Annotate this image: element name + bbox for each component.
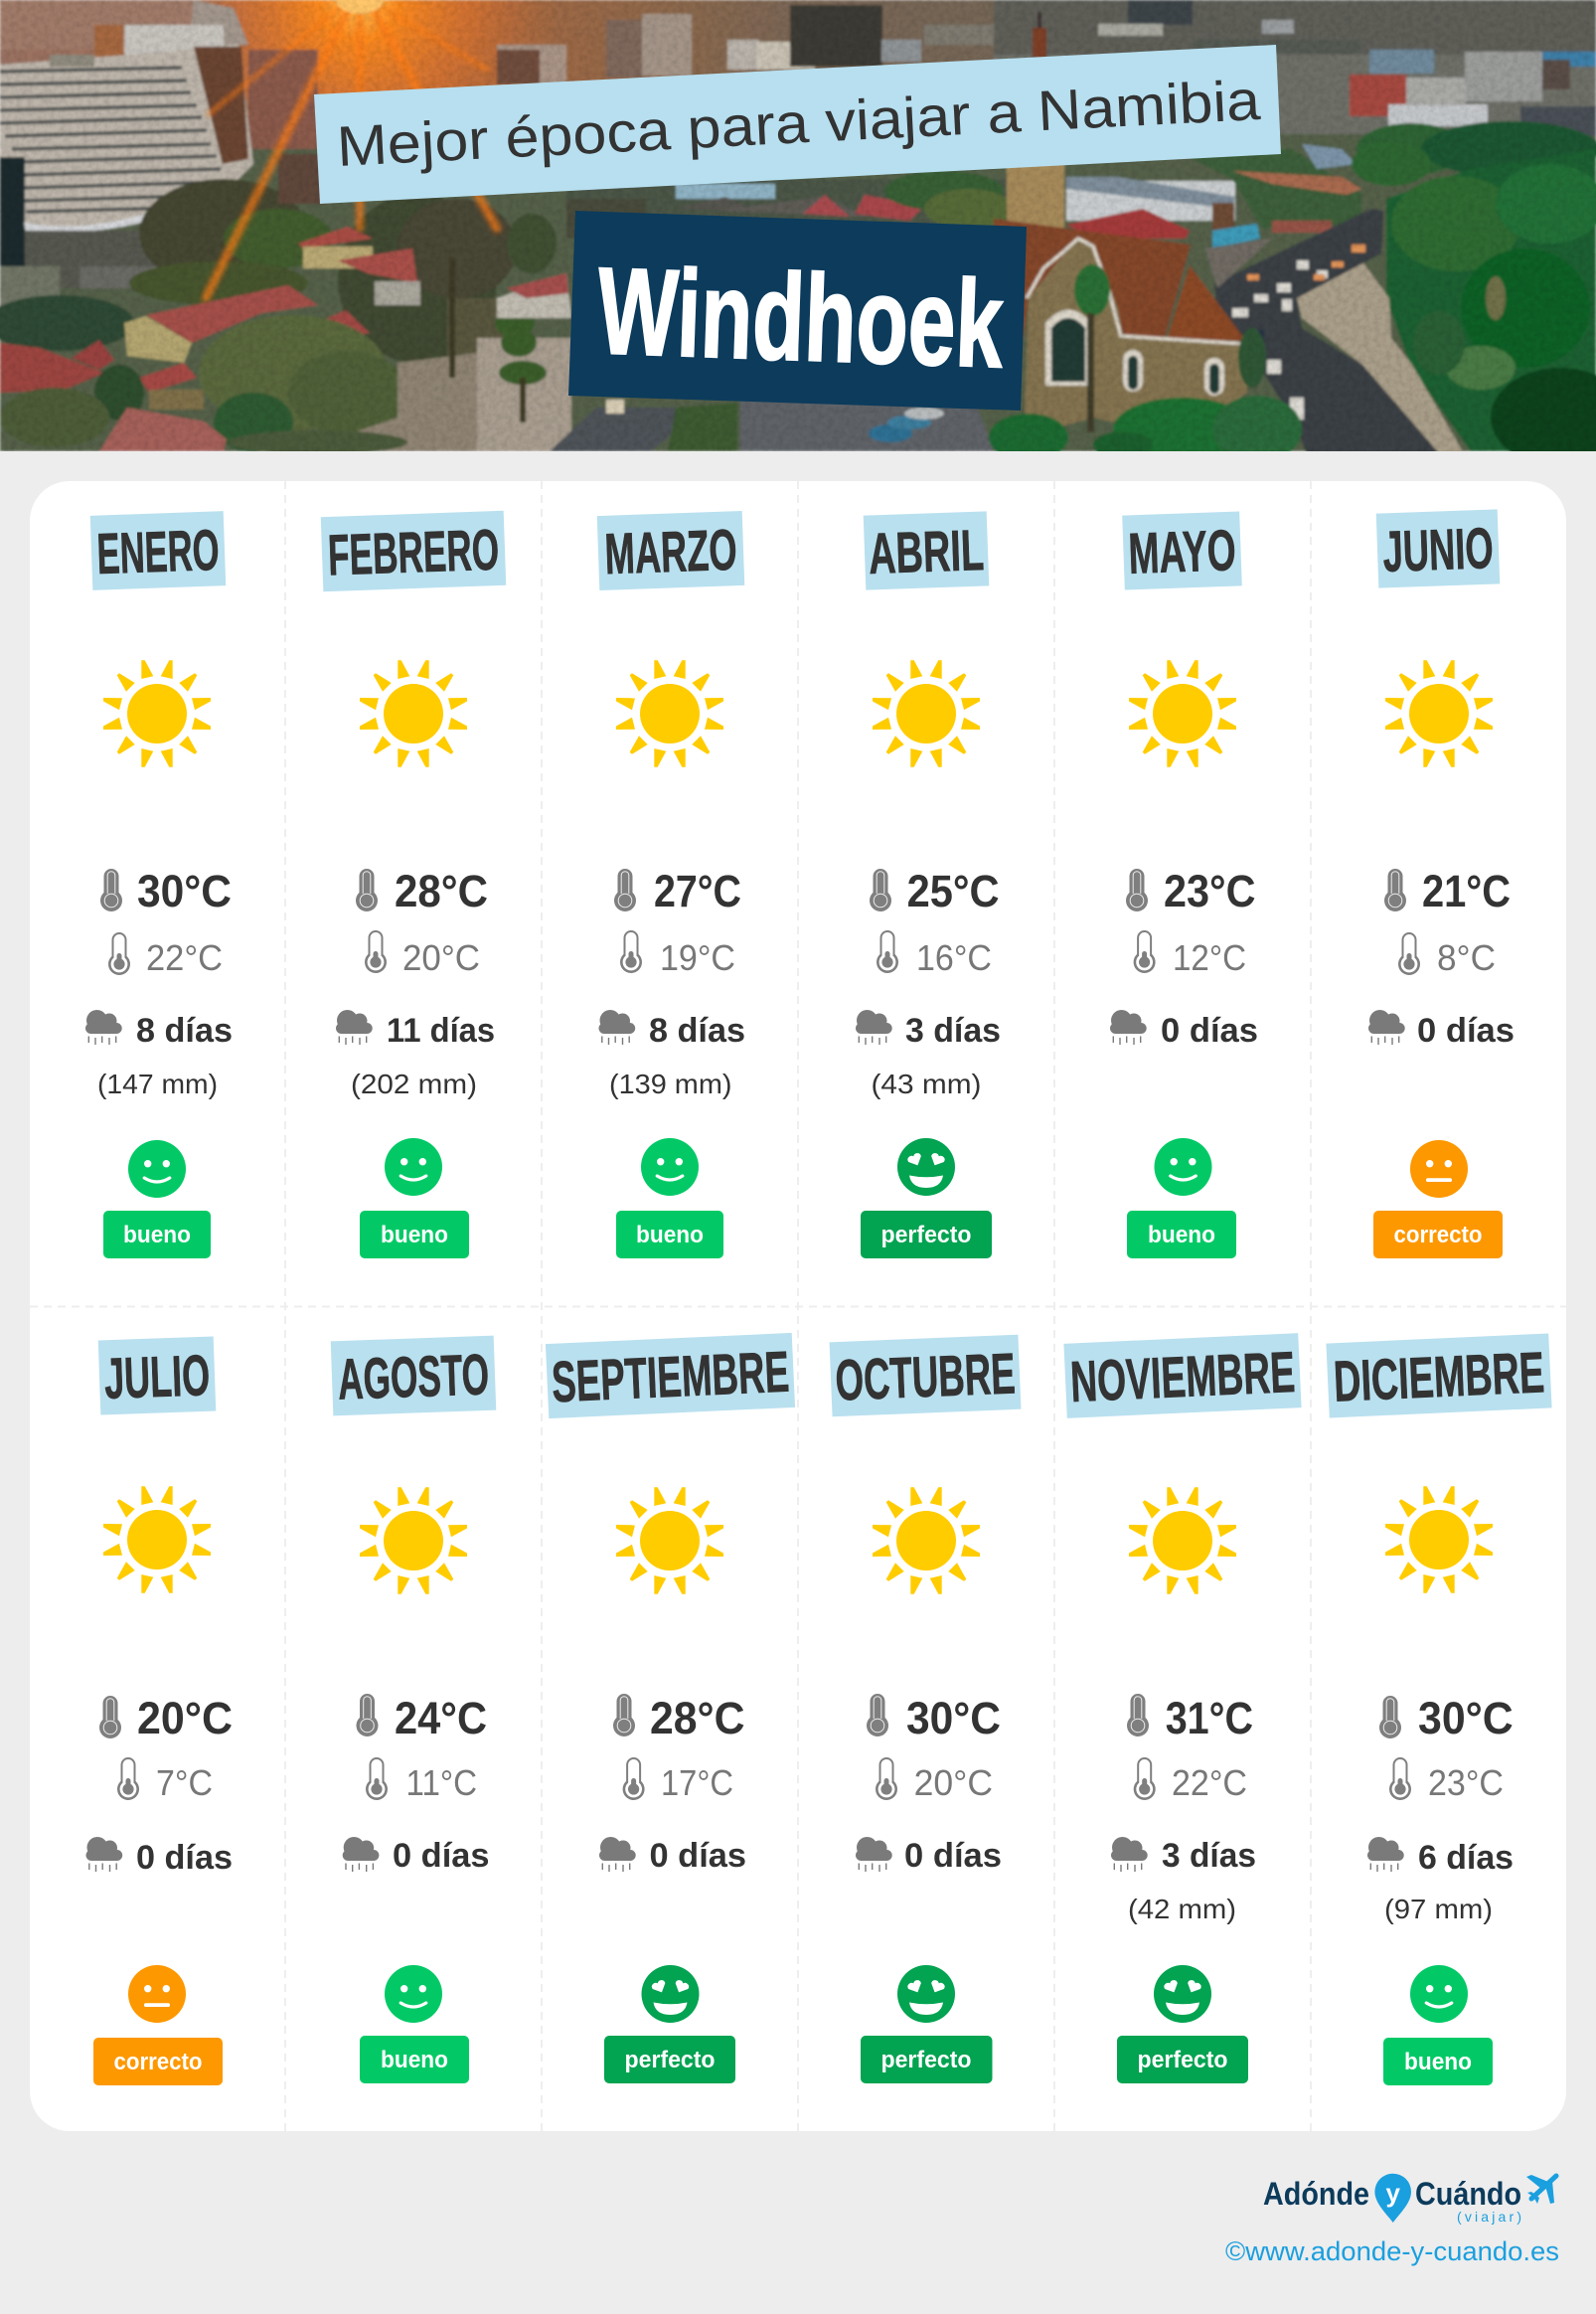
panel: diciembre <box>1326 1333 1552 2085</box>
rating badge <box>360 2036 469 2083</box>
panel: abril <box>856 511 1001 1258</box>
rating badge: perfecto <box>1137 2047 1228 2073</box>
icon: thermometer low <box>876 1757 897 1800</box>
min temperature: 11°C <box>405 1762 477 1803</box>
icon: thermometer high <box>1127 1694 1149 1736</box>
min temperature: 22°C <box>146 937 223 978</box>
icon: thermometer high <box>1384 869 1406 911</box>
icon: neutral face <box>128 1965 186 2023</box>
month label <box>864 511 989 590</box>
max temperature: 28°C <box>395 866 488 916</box>
icon: sun <box>360 1487 467 1594</box>
rating badge: bueno <box>123 1222 191 1248</box>
icon: heart-eyes smiley <box>897 1965 955 2023</box>
month label <box>90 511 226 590</box>
icon: heart-eyes smiley <box>1154 1965 1211 2023</box>
title text: Mejor época para viajar a Namibia <box>335 69 1262 179</box>
rating badge <box>103 1211 211 1258</box>
panel: enero <box>85 511 233 1258</box>
footer logo <box>1263 2174 1556 2225</box>
panel: marzo <box>597 511 745 1258</box>
icon: rain cloud <box>85 1010 122 1045</box>
icon: rain cloud <box>336 1010 373 1045</box>
icon: rain cloud <box>343 1837 379 1872</box>
rainfall: (42 mm) <box>1128 1894 1236 1924</box>
max temperature: 23°C <box>1164 866 1256 916</box>
month label <box>546 1333 795 1418</box>
rainy days: 8 días <box>649 1012 745 1050</box>
icon: sun <box>360 660 467 767</box>
month label: OCTUBRE <box>834 1341 1017 1413</box>
max temperature: 30°C <box>1418 1693 1514 1743</box>
month label: AGOSTO <box>337 1342 490 1412</box>
icon: thermometer high <box>356 869 378 911</box>
rating badge <box>604 2036 735 2083</box>
panel: septiembre <box>546 1333 795 2083</box>
icon: thermometer low <box>623 1757 645 1800</box>
icon: thermometer high <box>100 869 122 911</box>
city name banner <box>568 211 1027 411</box>
min temperature: 8°C <box>1437 937 1496 978</box>
rating badge <box>1383 2038 1493 2085</box>
max temperature: 27°C <box>654 866 741 916</box>
rainy days: 8 días <box>136 1012 233 1050</box>
panel: julio <box>85 1336 233 2085</box>
rating badge: bueno <box>636 1222 704 1248</box>
month label <box>1063 1333 1302 1418</box>
icon: thermometer low <box>365 930 387 973</box>
logo wordmark right: Cuándo <box>1415 2176 1521 2212</box>
rating badge: bueno <box>1148 1222 1215 1248</box>
month label <box>321 511 506 591</box>
rainy days: 6 días <box>1418 1839 1514 1877</box>
min temperature: 19°C <box>660 937 735 978</box>
rainy days: 0 días <box>1161 1012 1258 1050</box>
icon: sun <box>1129 1487 1236 1594</box>
icon: sun <box>1129 660 1236 767</box>
icon: rain cloud <box>1110 1010 1147 1045</box>
max temperature: 30°C <box>906 1693 1001 1743</box>
min temperature: 16°C <box>916 937 992 978</box>
icon: thermometer low <box>117 1757 139 1800</box>
main white card <box>30 481 1566 2131</box>
icon: sun <box>616 1487 723 1594</box>
month label <box>1376 509 1500 588</box>
rating badge <box>1127 1211 1236 1258</box>
rating badge: bueno <box>381 1222 448 1248</box>
icon: heart-eyes smiley <box>642 1965 700 2023</box>
icon: smiley <box>385 1138 442 1196</box>
rating badge: perfecto <box>880 2047 972 2073</box>
icon: sun <box>1385 1486 1493 1593</box>
header photo: Windhoek city view <box>0 0 1596 467</box>
rainfall: (97 mm) <box>1384 1894 1493 1924</box>
rainfall: (139 mm) <box>609 1069 731 1099</box>
icon: thermometer low <box>1389 1757 1411 1800</box>
icon: thermometer low <box>366 1757 388 1800</box>
icon: rain cloud <box>856 1837 892 1872</box>
min temperature: 7°C <box>156 1762 213 1803</box>
icon: heart-eyes smiley <box>897 1138 955 1196</box>
icon: smiley <box>1155 1138 1212 1196</box>
rating badge <box>93 2038 223 2085</box>
icon: thermometer high <box>356 1694 378 1736</box>
icon: smiley <box>641 1138 699 1196</box>
max temperature: 21°C <box>1422 866 1511 916</box>
panel: febrero <box>321 511 506 1258</box>
icon: thermometer high <box>614 869 636 911</box>
icon: sun <box>103 660 211 767</box>
rating badge <box>861 2036 992 2083</box>
logo pin: y <box>1385 2178 1400 2208</box>
icon: thermometer high <box>1126 869 1148 911</box>
icon: rain cloud <box>1111 1837 1148 1872</box>
rainy days: 0 días <box>650 1837 746 1875</box>
icon: rain cloud <box>599 1837 636 1872</box>
icon: sun <box>1385 660 1493 767</box>
month label <box>98 1336 216 1415</box>
rainy days: 0 días <box>393 1837 489 1875</box>
month label <box>1122 511 1242 590</box>
icon: smiley <box>128 1140 186 1198</box>
max temperature: 30°C <box>137 866 232 916</box>
panel: agosto <box>331 1336 496 2083</box>
icon: rain cloud <box>1368 1010 1405 1045</box>
month label: MAYO <box>1127 518 1237 586</box>
month label: ENERO <box>95 518 221 586</box>
min temperature: 17°C <box>661 1762 733 1803</box>
rating badge: perfecto <box>880 1222 972 1248</box>
icon: sun <box>873 1487 980 1594</box>
icon: thermometer high <box>1379 1696 1401 1738</box>
rating badge <box>616 1211 723 1258</box>
icon: thermometer low <box>1398 932 1420 975</box>
panel: mayo <box>1110 511 1258 1258</box>
min temperature: 20°C <box>402 937 480 978</box>
icon: smiley <box>385 1965 442 2023</box>
rainfall: (202 mm) <box>351 1069 477 1099</box>
month label <box>331 1336 496 1415</box>
max temperature: 28°C <box>650 1693 745 1743</box>
icon: rain cloud <box>85 1837 122 1872</box>
month label <box>597 511 744 590</box>
month label <box>830 1335 1021 1416</box>
rainfall: (43 mm) <box>871 1069 982 1099</box>
max temperature: 25°C <box>907 866 1000 916</box>
max temperature: 24°C <box>395 1693 487 1743</box>
rating badge <box>1117 2036 1248 2083</box>
rainy days: 3 días <box>905 1012 1001 1050</box>
min temperature: 12°C <box>1173 937 1246 978</box>
icon: thermometer high <box>613 1694 635 1736</box>
rainy days: 0 días <box>136 1839 233 1877</box>
city name: Windhoek <box>595 243 1006 394</box>
logo subtitle: (viajar) <box>1457 2209 1521 2225</box>
panel: octubre <box>830 1335 1021 2083</box>
icon: rain cloud <box>856 1010 892 1045</box>
icon: thermometer low <box>877 930 898 973</box>
icon: sun <box>103 1486 211 1593</box>
month label: ABRIL <box>868 518 985 586</box>
icon: sun <box>873 660 980 767</box>
icon: thermometer low <box>620 930 642 973</box>
min temperature: 20°C <box>914 1762 993 1803</box>
month label: FEBRERO <box>327 518 500 587</box>
max temperature: 31°C <box>1166 1693 1253 1743</box>
rainy days: 3 días <box>1162 1837 1256 1875</box>
icon: rain cloud <box>598 1010 635 1045</box>
month label: MARZO <box>603 518 738 586</box>
rating badge: bueno <box>1404 2049 1472 2075</box>
month label: NOVIEMBRE <box>1069 1340 1296 1414</box>
panel: junio <box>1368 509 1515 1258</box>
rating badge <box>1373 1211 1503 1258</box>
panel: noviembre <box>1063 1333 1302 2083</box>
icon: thermometer low <box>1134 1757 1156 1800</box>
logo wordmark left: Adónde <box>1263 2176 1369 2212</box>
rainfall: (147 mm) <box>97 1069 218 1099</box>
month label: JULIO <box>103 1343 211 1411</box>
icon: smiley <box>1410 1965 1468 2023</box>
icon: thermometer high <box>870 869 891 911</box>
min temperature: 23°C <box>1428 1762 1504 1803</box>
icon: thermometer high <box>99 1696 121 1738</box>
rating badge: correcto <box>113 2049 203 2075</box>
title banner <box>314 45 1281 204</box>
logo pin <box>1374 2174 1411 2223</box>
rainy days: 0 días <box>904 1837 1002 1875</box>
month label: JUNIO <box>1381 516 1495 584</box>
icon: thermometer low <box>108 932 130 975</box>
max temperature: 20°C <box>137 1693 233 1743</box>
min temperature: 22°C <box>1172 1762 1247 1803</box>
icon: rain cloud <box>1367 1837 1404 1872</box>
icon: thermometer low <box>1134 930 1156 973</box>
rating badge: correcto <box>1393 1222 1483 1248</box>
icon: thermometer high <box>867 1694 888 1736</box>
icon: neutral face <box>1410 1140 1468 1198</box>
icon: sun <box>616 660 723 767</box>
rating badge <box>861 1211 992 1258</box>
rating badge: bueno <box>381 2047 448 2073</box>
rainy days: 11 días <box>387 1012 495 1050</box>
icon: airplane <box>1526 2175 1556 2204</box>
footer url: ©www.adonde-y-cuando.es <box>1225 2236 1559 2266</box>
month label: SEPTIEMBRE <box>551 1340 790 1414</box>
rating badge: perfecto <box>624 2047 716 2073</box>
rainy days: 0 días <box>1417 1012 1515 1050</box>
rating badge <box>360 1211 469 1258</box>
